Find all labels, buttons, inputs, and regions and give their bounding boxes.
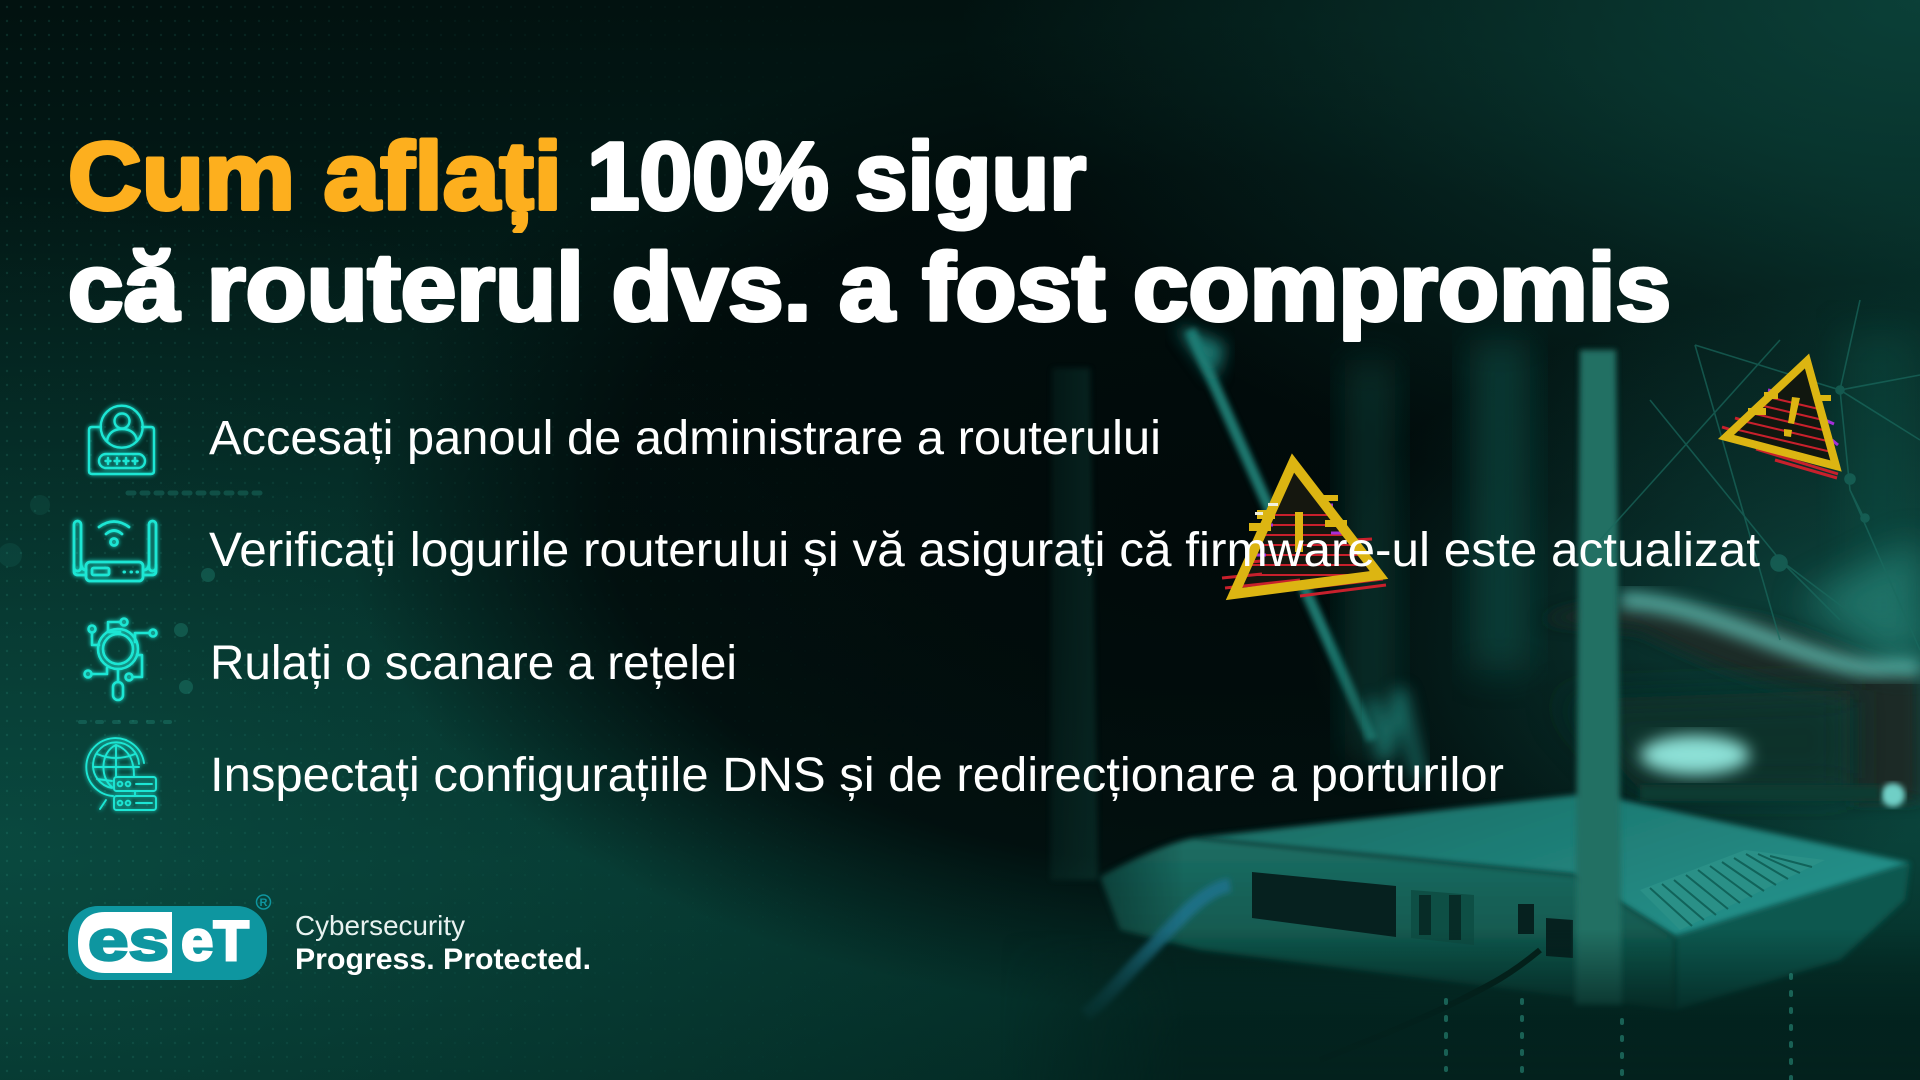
right antenna	[1575, 350, 1622, 1005]
laptop screen edge	[1190, 330, 1372, 740]
title line 1 highlight: Cum aflați	[68, 123, 562, 231]
icon: globe and DNS servers	[86, 738, 156, 810]
vent	[1640, 850, 1772, 930]
ESET logo	[68, 895, 270, 980]
step 3: Rulați o scanare a rețelei	[210, 637, 737, 690]
left antenna	[1050, 368, 1098, 880]
icon: wifi router	[74, 521, 156, 581]
registered mark: R	[260, 897, 268, 909]
checklist text	[209, 412, 1760, 802]
cables	[1085, 885, 1230, 1015]
dotted vertical accents	[1446, 975, 1791, 1080]
logo letters: eT	[181, 909, 249, 973]
tagline line 1: Cybersecurity	[295, 910, 465, 941]
logo letters	[88, 909, 249, 973]
step 2: Verificați logurile routerului și vă asigurați că firmware-ul este actualizat	[209, 524, 1760, 577]
icon: admin login panel	[89, 406, 154, 474]
background photo: laptop and router	[1000, 325, 1920, 1080]
title	[68, 123, 1671, 341]
router top	[1194, 795, 1910, 937]
warning triangle: upper glitch	[1722, 361, 1840, 478]
background dot accents	[0, 493, 268, 722]
tagline line 2: Progress. Protected.	[295, 943, 591, 976]
hand and keyboard	[1540, 604, 1920, 800]
bottom fade	[1080, 938, 1920, 1080]
ports	[1252, 872, 1396, 937]
glitch highlights	[1255, 503, 1278, 515]
glitch red bars	[1222, 539, 1386, 596]
title line 1: 100% sigur	[587, 123, 1086, 230]
glitch violet bars	[1768, 390, 1838, 445]
step 4: Inspectați configurațiile DNS și de redirecționare a porturilor	[210, 749, 1504, 802]
logo letters: es	[88, 909, 169, 973]
step 1: Accesați panoul de administrare a routerului	[209, 412, 1161, 465]
router front	[1100, 838, 1675, 1010]
registered mark	[256, 895, 270, 909]
router side	[1675, 863, 1910, 1010]
tagline	[295, 910, 591, 976]
network lines top right	[1600, 300, 1920, 650]
glitch violet bars	[1254, 505, 1352, 555]
icon: network scan magnifier	[84, 618, 156, 700]
blurred background columns	[1345, 360, 1395, 760]
title line 2: că routerul dvs. a fost compromis	[68, 234, 1671, 341]
warning triangle: lower glitch	[1222, 463, 1386, 596]
glitch red bars	[1722, 418, 1838, 478]
